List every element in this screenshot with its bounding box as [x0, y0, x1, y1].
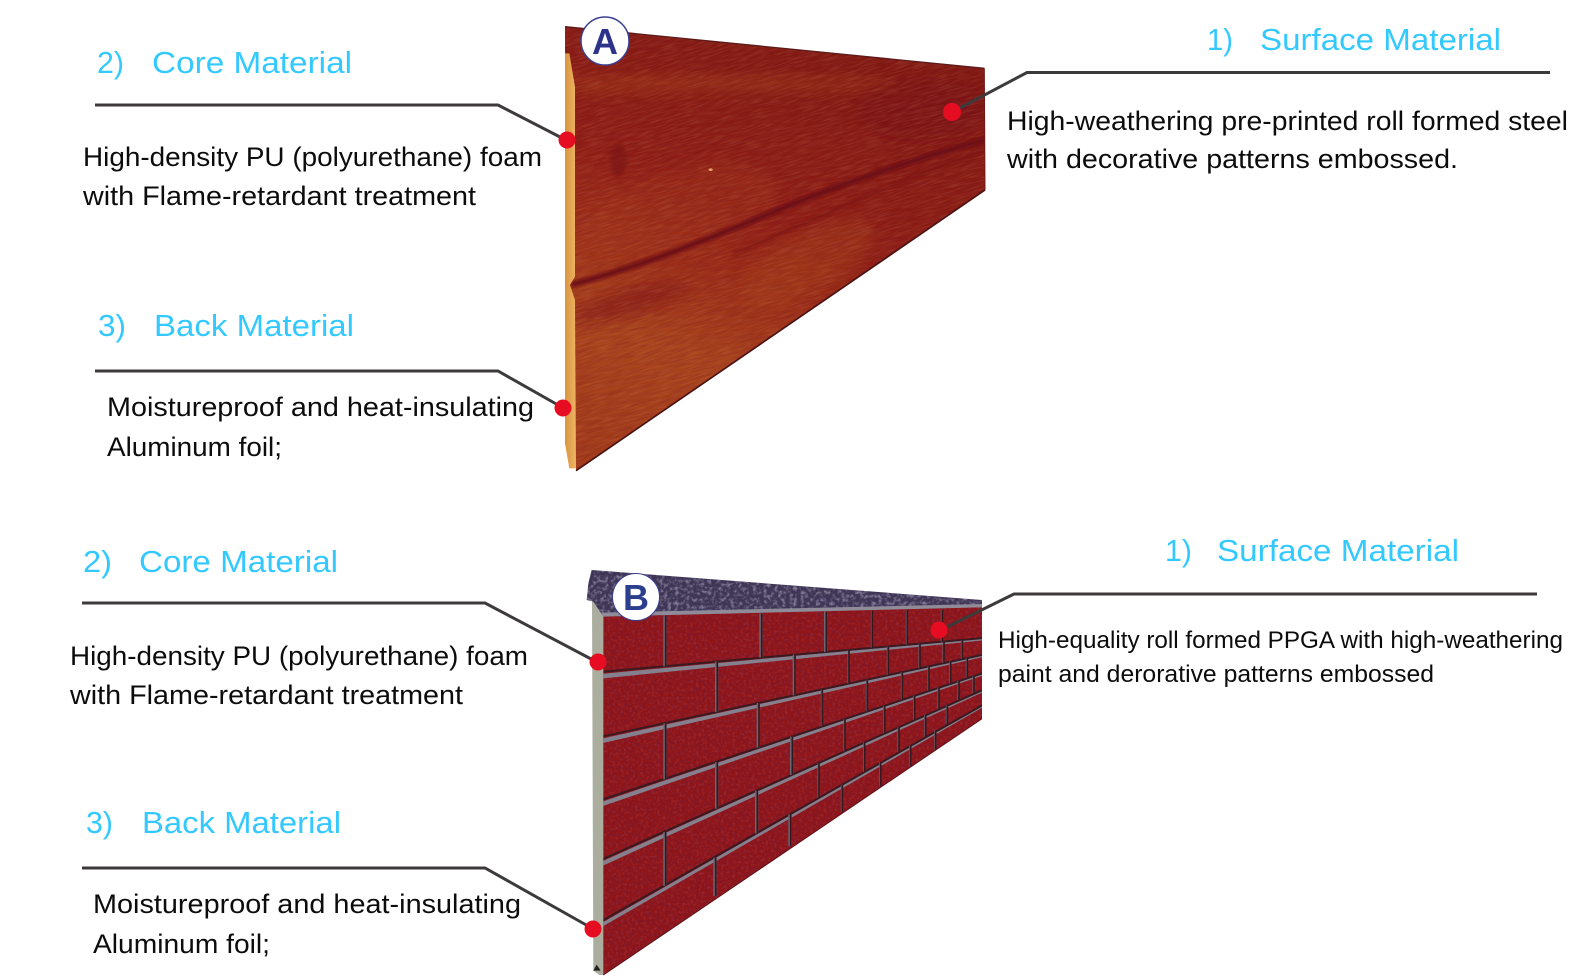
panel B: brick pattern panel: [580, 563, 987, 977]
marker B2: [590, 654, 606, 670]
wood surface: [565, 27, 984, 470]
callout A2: core material: [82, 45, 576, 211]
body text B1: High-equality roll formed PPGA with high-weathering: [998, 627, 1563, 654]
core foam strip A: [565, 52, 576, 468]
top locking band B: [586, 570, 982, 617]
lock detail: [593, 965, 601, 971]
body text B2: [69, 641, 528, 710]
heading B2: 2): [83, 544, 112, 579]
body text B1: paint and derorative patterns embossed: [998, 661, 1434, 688]
heading A2: 2): [97, 45, 124, 80]
leader line A2: [95, 105, 562, 138]
heading A2: Core Material: [152, 45, 352, 80]
body text B3: Aluminum foil;: [93, 929, 270, 959]
body text A3: Aluminum foil;: [107, 432, 282, 462]
leader line B2: [82, 603, 593, 660]
body text B2: High-density PU (polyurethane) foam: [70, 641, 528, 671]
callout B2: core material: [69, 544, 606, 710]
body text B3: Moistureproof and heat-insulating: [93, 889, 521, 919]
heading B1: Surface Material: [1217, 533, 1459, 568]
heading B3: Back Material: [142, 805, 341, 840]
heading A1: 1): [1207, 22, 1233, 57]
callout A3: back material: [95, 308, 572, 462]
leader line B1: [945, 594, 1537, 628]
left edge strip B: [592, 600, 604, 975]
badge A: [581, 17, 629, 65]
body text A1: [1006, 106, 1568, 174]
heading A3: 3): [98, 308, 126, 343]
body text A3: [107, 392, 534, 462]
body text A2: [82, 142, 542, 211]
leader line A3: [95, 371, 558, 405]
heading B1: 1): [1165, 533, 1192, 568]
badge B: [612, 574, 660, 620]
heading B3: 3): [86, 805, 113, 840]
vertical joints: [665, 612, 826, 896]
marker A2: [558, 132, 576, 148]
panel A: wood grain panel: [564, 26, 986, 472]
groove A: [571, 140, 985, 285]
body text A3: Moistureproof and heat-insulating: [107, 392, 534, 422]
body text A1: High-weathering pre-printed roll formed steel: [1007, 106, 1568, 136]
marker B3: [584, 920, 602, 938]
marker A1: [943, 103, 961, 121]
brick face B: [600, 603, 987, 977]
body text A2: with Flame-retardant treatment: [82, 181, 477, 211]
body text A2: High-density PU (polyurethane) foam: [83, 142, 542, 172]
leader line B3: [82, 868, 588, 926]
body text B2: with Flame-retardant treatment: [69, 680, 464, 710]
mortar lines: [600, 638, 983, 928]
body text A1: with decorative patterns embossed.: [1006, 144, 1458, 174]
heading A1: Surface Material: [1260, 22, 1501, 57]
leader line A1: [958, 72, 1550, 109]
marker B1: [930, 622, 948, 638]
callout A1: surface material: [943, 22, 1568, 174]
badge B: B: [623, 577, 649, 618]
callout B1: surface material: [930, 533, 1563, 688]
body text B1: [998, 627, 1563, 688]
marker A3: [554, 400, 572, 416]
heading A3: Back Material: [154, 308, 354, 343]
body text B3: [93, 889, 521, 959]
badge A: A: [592, 21, 618, 62]
callout B3: back material: [82, 805, 602, 959]
heading B2: Core Material: [139, 544, 338, 579]
